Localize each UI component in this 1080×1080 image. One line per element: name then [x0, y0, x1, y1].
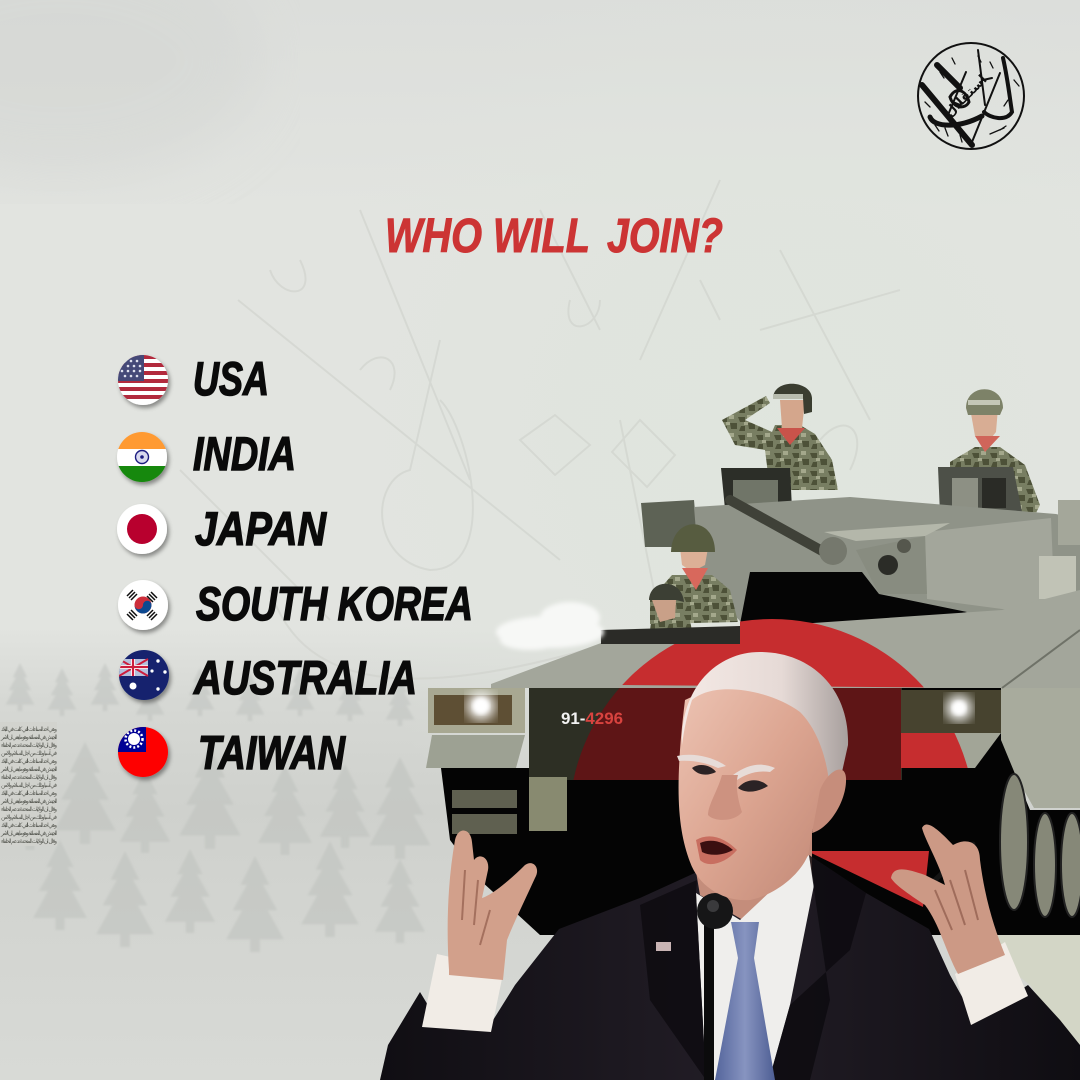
road wheels [1000, 774, 1080, 917]
flag: USA [118, 355, 168, 405]
ear [812, 769, 846, 833]
newspaper text scrap: في آسيا وذلك من اجل السلام والامن [1, 812, 57, 821]
head [679, 665, 835, 900]
label: Australia: AUSTRALIA [193, 651, 417, 704]
turret [641, 500, 698, 547]
newspaper text scrap: الجيش في المنطقة وهو ما يعني ان الامر [0, 766, 57, 773]
soldiers on turret [722, 384, 1040, 515]
suit [380, 855, 1080, 1080]
newspaper text scrap: في آسيا وذلك من اجل السلام والامن [1, 780, 57, 789]
tank [426, 467, 1080, 935]
title: WHO WILL [385, 210, 590, 263]
brows and eyes [677, 755, 775, 792]
title: JOIN? [607, 210, 723, 263]
newspaper text scrap: وهي احد الصناعات التي كانت في البلاد [1, 790, 57, 797]
ground [520, 930, 1080, 1060]
nose [708, 775, 742, 820]
right cuff [955, 942, 1028, 1025]
shirt [696, 855, 814, 1080]
mouth [696, 836, 737, 864]
microphone [697, 893, 733, 1080]
flag: Australia [119, 650, 169, 700]
pen [935, 844, 973, 880]
newspaper text scrap [0, 722, 57, 846]
logo emblem: استقلال [942, 72, 990, 120]
red sun on hull [569, 619, 975, 1025]
label: Taiwan: TAIWAN [198, 726, 346, 779]
soldier saluting [722, 384, 838, 490]
hatches [721, 468, 792, 509]
left headlight box [428, 688, 525, 733]
soldier right [950, 389, 1040, 515]
label: India: INDIA [193, 427, 296, 480]
flag: Japan [117, 504, 167, 554]
right headlight box [900, 690, 1001, 733]
newspaper text scrap: وقال ان الولايات المتحدة تدعم الحلفاء [1, 774, 57, 781]
newspaper text scrap: في آسيا وذلك من اجل السلام والامن [1, 748, 57, 757]
lower hull and tracks [441, 688, 1080, 935]
forest backdrop [3, 663, 431, 952]
headlight glows [467, 692, 972, 721]
newspaper text scrap: الجيش في المنطقة وهو ما يعني ان الامر [0, 798, 57, 805]
flag: India [117, 432, 167, 483]
newspaper text scrap: وهي احد الصناعات التي كانت في البلاد [1, 726, 57, 733]
newspaper text scrap: الجيش في المنطقة وهو ما يعني ان الامر [0, 734, 57, 741]
lapels [640, 855, 866, 1080]
country list [117, 352, 473, 779]
newspaper text scrap: وقال ان الولايات المتحدة تدعم الحلفاء [1, 742, 57, 749]
label: Japan: JAPAN [195, 502, 327, 555]
faint calligraphy watermark [180, 180, 900, 679]
Biden figure [380, 652, 1080, 1080]
flag: Taiwan [118, 727, 168, 777]
soldier lower [649, 584, 692, 630]
flag: South Korea [118, 580, 168, 630]
hair [682, 652, 848, 792]
neck [694, 810, 812, 930]
hull number: 91-4296 [561, 709, 623, 728]
newspaper text scrap: وقال ان الولايات المتحدة تدعم الحلفاء [1, 838, 57, 845]
label: USA: USA [193, 352, 269, 405]
tie [715, 922, 775, 1080]
left hand [448, 830, 537, 980]
newspaper text scrap: وهي احد الصناعات التي كانت في البلاد [1, 758, 57, 765]
flag pin [656, 942, 671, 951]
left cuff [422, 954, 504, 1032]
newspaper text scrap: الجيش في المنطقة وهو ما يعني ان الامر [0, 830, 57, 837]
hull [491, 590, 1080, 688]
newspaper text scrap: وهي احد الصناعات التي كانت في البلاد [1, 822, 57, 829]
right hand [891, 825, 1005, 974]
soldier front [650, 524, 738, 624]
newspaper text scrap: وقال ان الولايات المتحدة تدعم الحلفاء [1, 806, 57, 813]
label: South Korea: SOUTH KOREA [196, 577, 473, 630]
tank gun [730, 500, 824, 552]
cloud [496, 602, 604, 650]
logo emblem [918, 43, 1024, 149]
